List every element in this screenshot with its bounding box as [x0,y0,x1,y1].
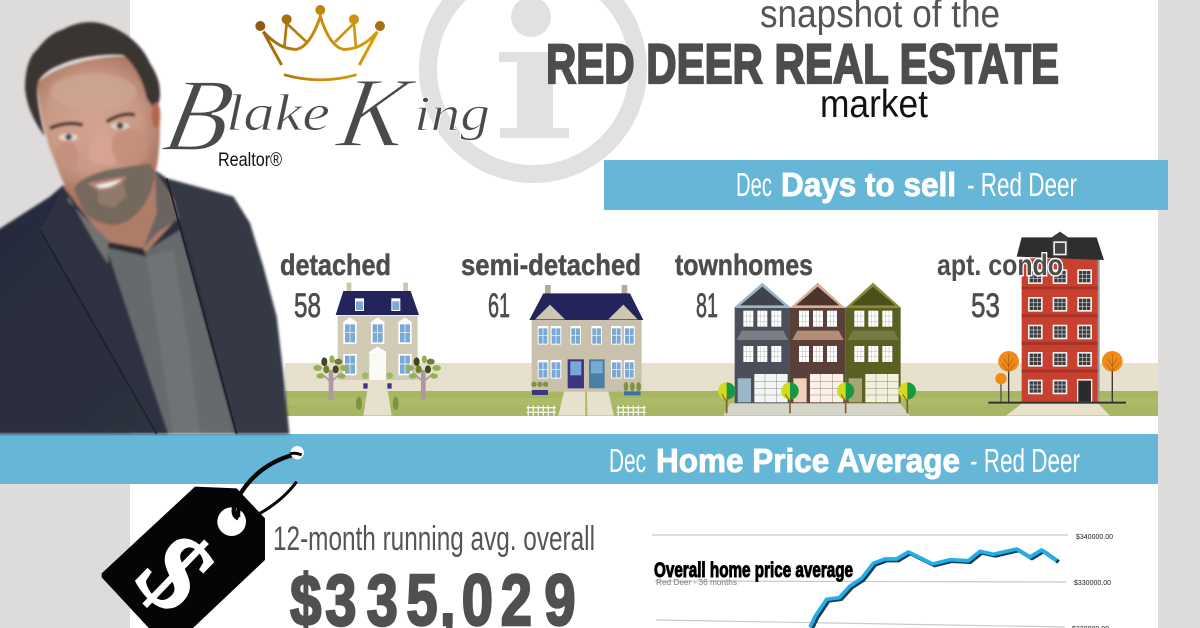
left lapel [40,185,168,434]
chart gridlines [652,535,1068,627]
number: apt. condo 53: 53 [971,287,1000,325]
label: semi-detached: semi-detached [461,249,641,282]
axis labels [1072,532,1113,628]
house: townhomes [718,283,916,416]
hair [25,22,160,137]
number: townhomes 81: 81 [696,287,718,325]
banner: days to sell: Dec [736,166,772,203]
logo: Blake King signature [155,57,490,173]
property type labels and days-to-sell numbers [280,249,1063,325]
label: detached: detached [280,249,391,282]
banner: home price average: - Red Deer [970,442,1080,479]
ground strip: beige wall and green lawn [285,363,1158,416]
title block [546,0,1059,126]
title line: market: market [820,83,928,126]
label: Realtor: Realtor® [218,150,282,171]
logo: Blake King signature: B [155,57,243,173]
banner: home price average [0,434,1158,484]
house: detached [313,283,441,416]
face [37,57,160,225]
chart subtitle: Red Deer - 36 months [656,577,737,587]
blazer [0,170,289,434]
house: semi-detached [527,285,646,416]
number: detached 58: 58 [294,287,321,325]
banner: home price average: Dec [609,442,646,479]
beard [74,163,155,225]
number: semi-detached 61: 61 [488,287,510,325]
portrait: man in dark blazer [0,22,289,434]
icon: large info circle watermark [428,0,638,174]
axis labels: $330000.00 [1074,578,1111,587]
label: townhomes: townhomes [675,249,813,282]
logo: crown [255,5,385,80]
cheek [112,128,148,165]
axis labels: $340000.00 [1076,532,1113,541]
label: apt. condo: apt. condo [937,249,1063,282]
neck [63,170,182,252]
forehead highlight [50,73,137,110]
text: 12-month running average overall: 12-month running avg. overall [273,520,595,558]
chart line [810,549,1059,628]
logo: Blake King signature: ing [414,85,490,141]
collar band [107,242,147,257]
shirt [107,230,235,434]
chart title: Overall home price average [654,559,853,582]
logo: Blake King signature: lake [226,85,330,142]
eyes and brows [50,114,135,128]
building: apartment condo [988,232,1126,416]
banner: days to sell [604,160,1168,210]
ear [152,102,160,128]
banner: home price average: Home Price Average [656,442,960,479]
nose [87,127,115,165]
logo: Blake King signature: K [329,57,422,168]
banner: days to sell: Days to sell [781,166,956,203]
banner: days to sell: - Red Deer [967,166,1077,203]
right lapel and sleeve [167,178,289,434]
icon: price tag [102,446,304,628]
line chart: overall home price average [652,532,1113,628]
